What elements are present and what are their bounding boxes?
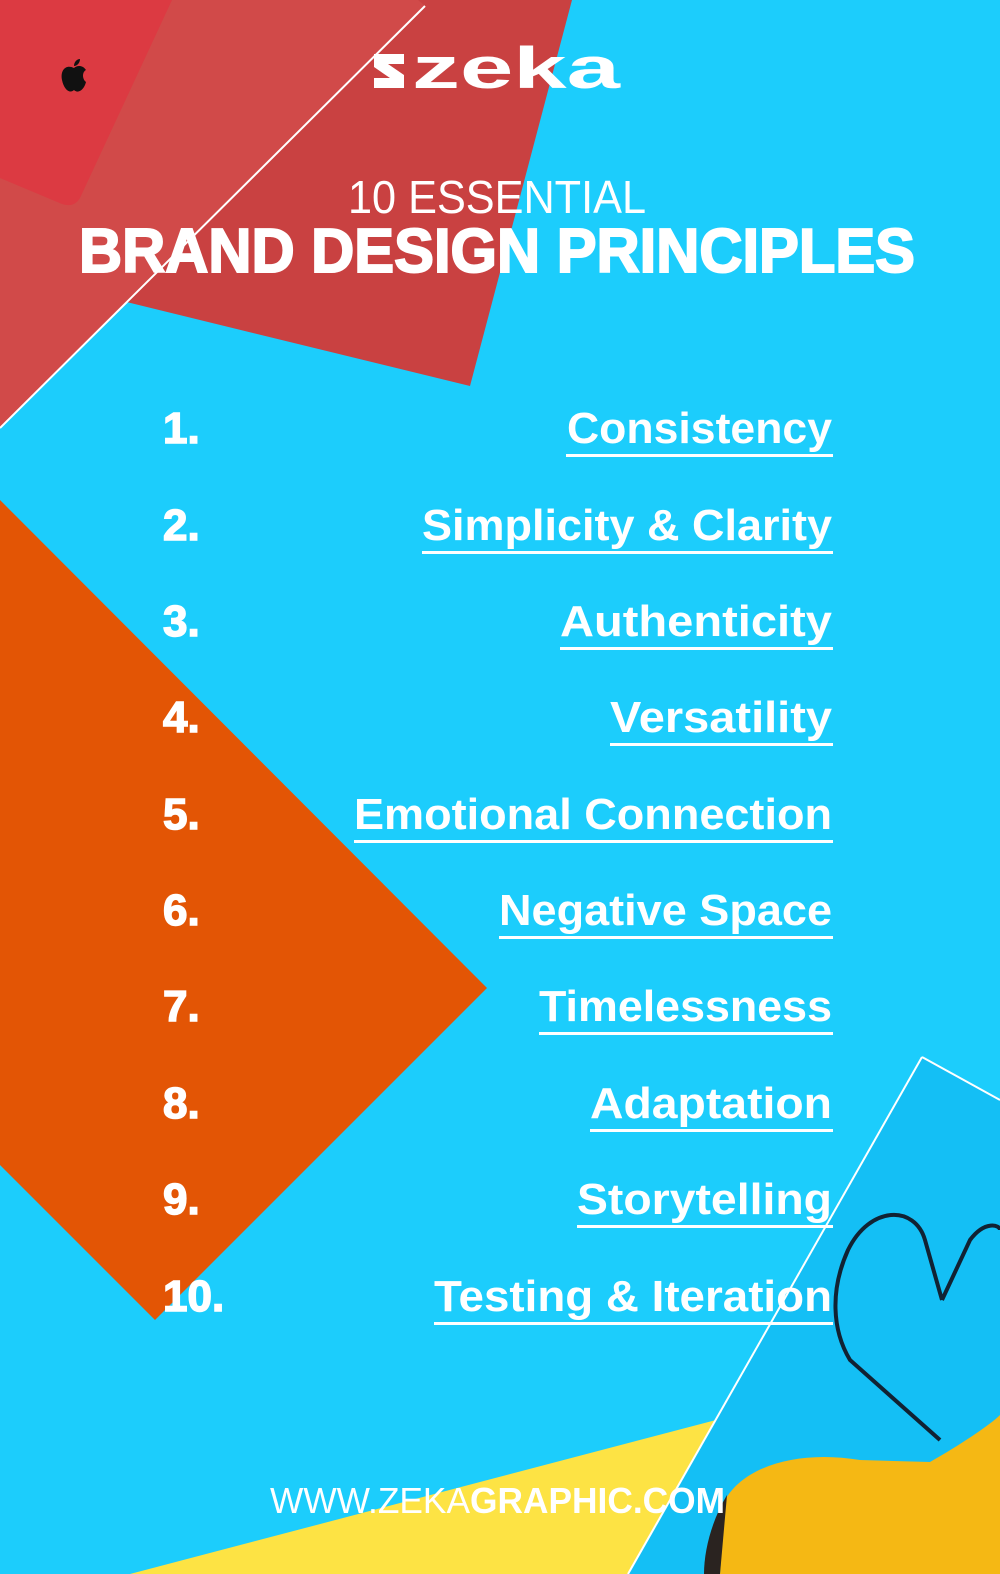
footer website: WWW.ZEKAGRAPHIC.COM [270, 1480, 725, 1521]
title [79, 171, 915, 286]
photo: red phone [0, 0, 425, 428]
yellow bottom shape [130, 1420, 716, 1574]
item 6: Negative Space [499, 886, 832, 935]
item 9 [163, 1175, 833, 1228]
orange diamond shape [0, 500, 487, 1320]
item 7: Timelessness [539, 982, 832, 1031]
item 9: 9. [163, 1175, 200, 1224]
item 10 [163, 1272, 833, 1325]
item 3: Authenticity [560, 597, 833, 646]
logo: zeka: zeka [412, 36, 621, 101]
item 9: Storytelling [577, 1175, 832, 1224]
item 10: 10. [163, 1272, 224, 1321]
item 6 [163, 886, 833, 939]
item 4 [163, 693, 833, 746]
item 7 [163, 982, 833, 1035]
title: 10 ESSENTIAL [348, 171, 646, 223]
item 4: 4. [163, 693, 200, 742]
item 5: 5. [163, 790, 200, 839]
item 10: Testing & Iteration [434, 1272, 832, 1321]
item 1: 1. [163, 404, 200, 453]
item 1 [163, 404, 833, 457]
item 2: 2. [163, 501, 200, 550]
item 8: Adaptation [590, 1079, 832, 1128]
item 8 [163, 1079, 833, 1132]
item 5: Emotional Connection [354, 790, 832, 839]
item 2 [163, 501, 833, 554]
photo: yellow boot with heart lace [628, 1057, 1000, 1574]
logo: zeka [374, 36, 621, 101]
list of principles [163, 404, 833, 1325]
item 7: 7. [163, 982, 200, 1031]
item 3 [163, 597, 833, 650]
item 8: 8. [163, 1079, 200, 1128]
red background shape [110, 0, 572, 386]
item 1: Consistency [567, 404, 833, 453]
item 2: Simplicity & Clarity [422, 501, 833, 550]
item 3: 3. [163, 597, 200, 646]
item 6: 6. [163, 886, 200, 935]
title: BRAND DESIGN PRINCIPLES [79, 217, 915, 286]
item 4: Versatility [610, 693, 833, 742]
item 5 [163, 790, 833, 843]
